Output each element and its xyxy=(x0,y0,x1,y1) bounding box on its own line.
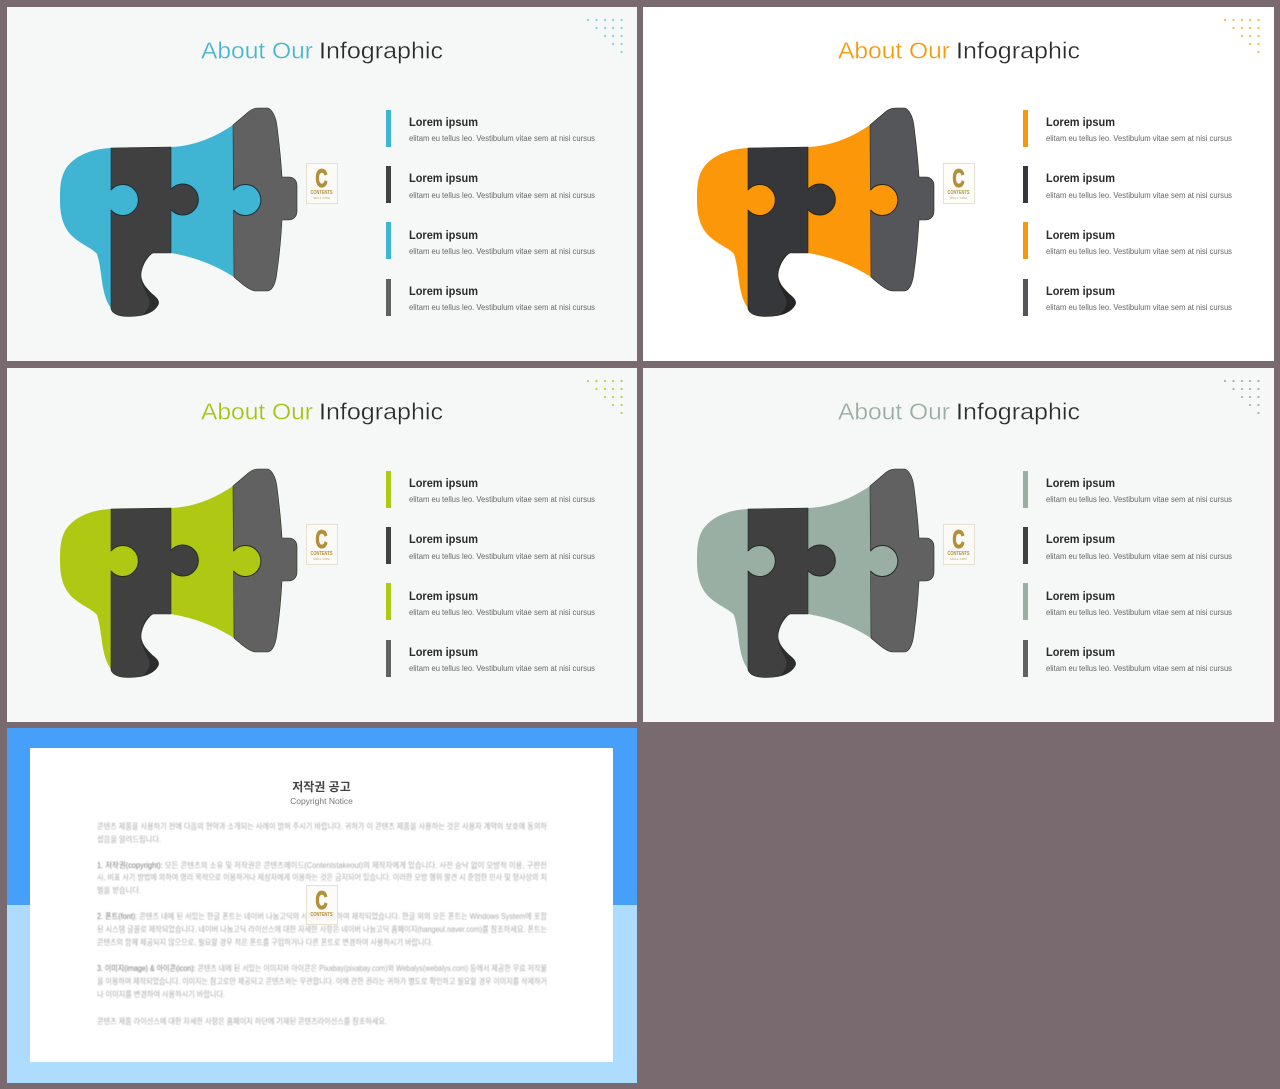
panel: copyright notice xyxy=(7,728,637,1083)
item 4 xyxy=(1023,640,1232,677)
logo badge: C xyxy=(316,165,328,193)
notice text: 셨음을 알려드립니다. xyxy=(97,834,161,844)
item 4: Lorem ipsum xyxy=(1046,286,1115,298)
item 4 xyxy=(1023,279,1232,316)
item 2: elitam eu tellus leo. Vestibulum vitae sem at nisi cursus xyxy=(409,191,595,200)
item 4: elitam eu tellus leo. Vestibulum vitae sem at nisi cursus xyxy=(409,664,595,673)
logo badge xyxy=(944,524,974,564)
logo badge xyxy=(306,524,338,564)
notice text: 콘텐츠 제품 라이선스에 대한 자세한 사항은 홈페이지 하단에 기재된 콘텐츠라이선스를 참조하세요. xyxy=(97,1016,387,1026)
icon: puzzle megaphone xyxy=(60,108,297,316)
item 1: Lorem ipsum xyxy=(409,478,478,490)
logo badge: MALL.COM xyxy=(950,196,967,200)
title xyxy=(838,398,1080,424)
notice text: 콘텐츠의 함께 제공되지 않으므로, 필요할 경우 적은 폰트를 구입하거나 다른 폰트로 변경하여 사용하시기 바랍니다. xyxy=(97,937,433,947)
item 4: elitam eu tellus leo. Vestibulum vitae sem at nisi cursus xyxy=(1046,664,1232,673)
list xyxy=(1023,110,1232,316)
notice text: 2. 폰트(font): 콘텐츠 내에 된 서있는 한글 폰트는 네이버 나눔고딕의 서체를 사용하여 제작되었습니다. 한글 외의 모든 폰트는 Windows System에 포함 xyxy=(97,911,548,921)
title: Infographic xyxy=(956,398,1080,424)
title xyxy=(838,38,1080,64)
panel: teal slide xyxy=(7,7,637,361)
item 4: Lorem ipsum xyxy=(409,647,478,659)
item 3: Lorem ipsum xyxy=(1046,591,1115,603)
panel: sage slide xyxy=(643,368,1274,722)
logo badge: MALL.COM xyxy=(950,557,967,561)
item 2 xyxy=(1023,527,1232,564)
heading: Copyright Notice xyxy=(290,796,353,806)
title: About Our xyxy=(201,398,313,424)
item 2 xyxy=(1023,166,1232,203)
item 2: elitam eu tellus leo. Vestibulum vitae sem at nisi cursus xyxy=(409,552,595,561)
logo badge: C xyxy=(952,165,964,193)
item 3: Lorem ipsum xyxy=(1046,230,1115,242)
notice text xyxy=(97,821,548,1026)
item 3 xyxy=(1023,583,1232,620)
item 4: elitam eu tellus leo. Vestibulum vitae sem at nisi cursus xyxy=(409,303,595,312)
icon: puzzle megaphone xyxy=(60,469,297,677)
panel: lime slide xyxy=(7,368,637,722)
item 2 xyxy=(386,166,595,203)
item 3 xyxy=(386,583,595,620)
logo badge: C xyxy=(952,526,964,554)
notice text: 3. 이미지(image) & 아이콘(icon): 콘텐츠 내에 된 서있는 이미지와 아이콘은 Pixabay(pixabay.com)와 Webalys(webalys.com) 등에서 제공한 무료 저작물 xyxy=(97,963,547,973)
item 1: Lorem ipsum xyxy=(1046,117,1115,129)
list xyxy=(1023,471,1232,677)
notice text: 벌을 받습니다. xyxy=(97,885,141,895)
item 4: elitam eu tellus leo. Vestibulum vitae sem at nisi cursus xyxy=(1046,303,1232,312)
title: Infographic xyxy=(319,398,443,424)
item 1: elitam eu tellus leo. Vestibulum vitae sem at nisi cursus xyxy=(1046,134,1232,143)
logo badge xyxy=(306,164,338,204)
notice text: 을 이용하여 제작되었습니다. 이미지는 참고로만 제공되고 콘텐츠와는 무관합니다. 이에 관한 권리는 귀하가 별도로 확인하고 필요할 경우 이미지를 삭제하거 xyxy=(97,976,547,986)
item 1 xyxy=(1023,471,1232,508)
title: Infographic xyxy=(956,38,1080,64)
notice text: 1. 저작권(copyright): 모든 콘텐츠의 소유 및 저작권은 콘텐츠메이드(Contentstakeout)의 제작자에게 있습니다. 사전 승낙 없이 모방적 이용, 구판전 xyxy=(97,860,547,870)
dot pattern xyxy=(1224,19,1260,53)
logo badge: MALL.COM xyxy=(313,196,330,200)
heading xyxy=(290,779,353,806)
item 4: Lorem ipsum xyxy=(409,286,478,298)
item 1: elitam eu tellus leo. Vestibulum vitae sem at nisi cursus xyxy=(409,495,595,504)
item 1: Lorem ipsum xyxy=(1046,478,1115,490)
item 3 xyxy=(386,222,595,259)
item 3: elitam eu tellus leo. Vestibulum vitae sem at nisi cursus xyxy=(1046,247,1232,256)
item 4: Lorem ipsum xyxy=(1046,647,1115,659)
item 1 xyxy=(386,471,595,508)
title: Infographic xyxy=(319,38,443,64)
logo badge xyxy=(306,886,338,924)
item 3: Lorem ipsum xyxy=(409,230,478,242)
item 3: elitam eu tellus leo. Vestibulum vitae sem at nisi cursus xyxy=(409,608,595,617)
dot pattern xyxy=(1224,380,1260,414)
item 1: elitam eu tellus leo. Vestibulum vitae sem at nisi cursus xyxy=(1046,495,1232,504)
notice text: 콘텐츠 제품을 사용하기 전에 다음의 현약과 소개되는 사례이 밝혀 주시기 바랍니다. 귀하가 이 콘텐츠 제품을 사용하는 것은 사용자 계약의 보호에 동의하 xyxy=(97,821,548,831)
title: About Our xyxy=(838,38,950,64)
heading: 저작권 공고 xyxy=(292,779,351,794)
item 2: Lorem ipsum xyxy=(409,534,478,546)
item 2: elitam eu tellus leo. Vestibulum vitae sem at nisi cursus xyxy=(1046,552,1232,561)
item 2: Lorem ipsum xyxy=(1046,173,1115,185)
item 4 xyxy=(386,640,595,677)
logo badge: CONTENTS xyxy=(948,190,970,196)
logo badge xyxy=(944,164,974,204)
icon: puzzle megaphone xyxy=(697,469,934,677)
item 2: elitam eu tellus leo. Vestibulum vitae sem at nisi cursus xyxy=(1046,191,1232,200)
notice text: 시, 비표 사기 방법에 의하여 영리 목적으로 이용하거나 제삼자에게 이용하는 것은 금지되어 있습니다. 이러한 모방 행위 발견 시 준엄한 민사 및 형사상의 처 xyxy=(97,872,547,882)
item 3: elitam eu tellus leo. Vestibulum vitae sem at nisi cursus xyxy=(409,247,595,256)
item 1: elitam eu tellus leo. Vestibulum vitae sem at nisi cursus xyxy=(409,134,595,143)
logo badge: CONTENTS xyxy=(310,912,333,918)
item 1: Lorem ipsum xyxy=(409,117,478,129)
notice text: 된 시스템 글꼴로 제작되었습니다. 네이버 나눔고딕 라이선스에 대한 자세한 사항은 네이버 나눔고딕 홈페이지(hangeul.naver.com)를 참조하세요. 폰트는 xyxy=(97,924,547,934)
logo badge: CONTENTS xyxy=(310,551,333,557)
logo badge: CONTENTS xyxy=(310,190,333,196)
logo badge: CONTENTS xyxy=(948,551,970,557)
notice text: 나 이미지를 변경하여 사용하시기 바랍니다. xyxy=(97,989,225,999)
title xyxy=(201,398,443,424)
logo badge: C xyxy=(316,887,328,915)
icon: puzzle megaphone xyxy=(697,108,934,316)
logo badge: MALL.COM xyxy=(313,557,330,561)
dot pattern xyxy=(587,380,623,414)
title: About Our xyxy=(201,38,313,64)
item 4 xyxy=(386,279,595,316)
title xyxy=(201,38,443,64)
item 1 xyxy=(1023,110,1232,147)
dot pattern xyxy=(587,19,623,53)
logo badge: C xyxy=(316,526,328,554)
item 1 xyxy=(386,110,595,147)
item 3: Lorem ipsum xyxy=(409,591,478,603)
item 3: elitam eu tellus leo. Vestibulum vitae sem at nisi cursus xyxy=(1046,608,1232,617)
item 2: Lorem ipsum xyxy=(409,173,478,185)
list xyxy=(386,110,595,316)
item 2: Lorem ipsum xyxy=(1046,534,1115,546)
item 3 xyxy=(1023,222,1232,259)
list xyxy=(386,471,595,677)
title: About Our xyxy=(838,398,950,424)
panel: orange slide xyxy=(643,7,1274,361)
item 2 xyxy=(386,527,595,564)
